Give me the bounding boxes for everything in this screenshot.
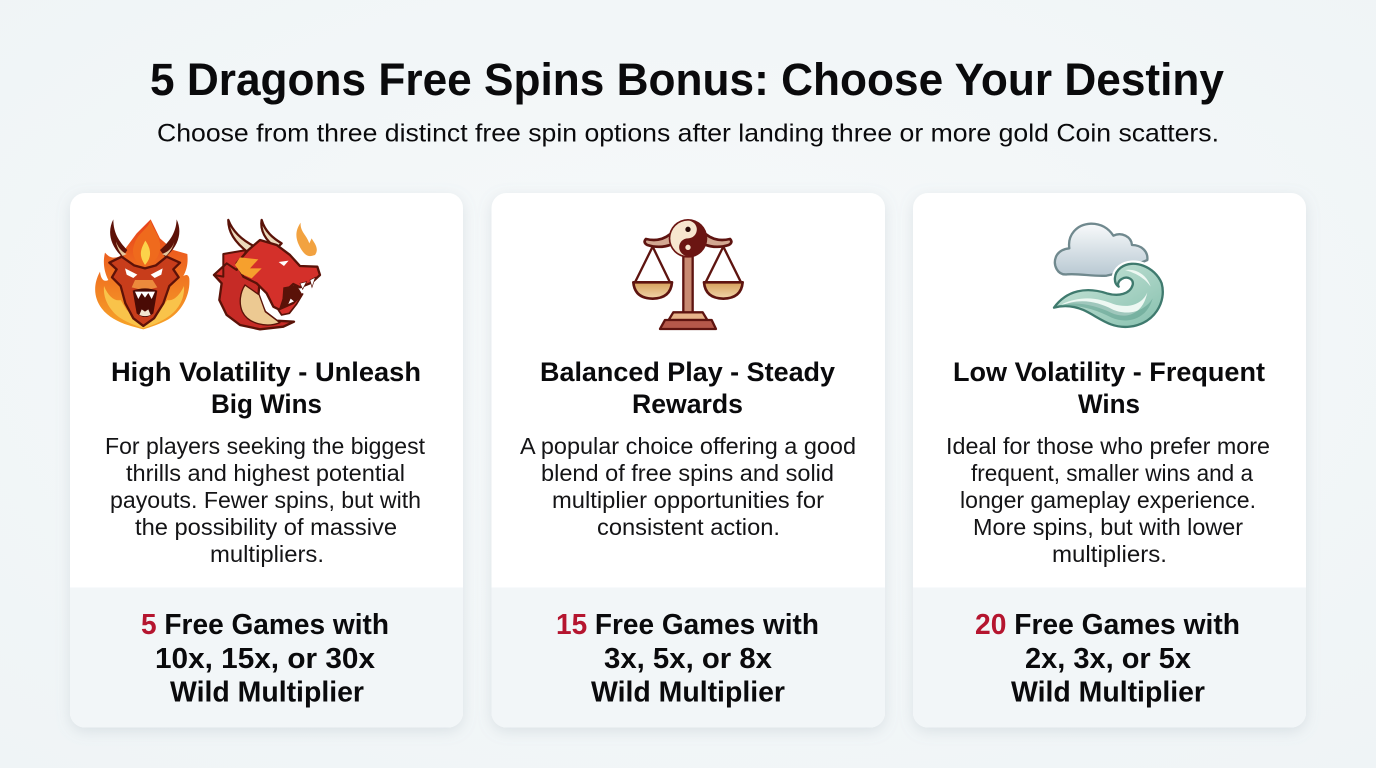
description <box>105 433 426 567</box>
description: the possibility of massive <box>135 514 397 540</box>
heading: High Volatility - Unleash <box>111 357 421 387</box>
heading: Rewards <box>632 389 743 419</box>
heading <box>953 357 1265 419</box>
panel: balanced play <box>492 193 885 728</box>
description <box>520 433 856 540</box>
description: A popular choice offering a good <box>520 433 856 459</box>
free games <box>141 609 389 708</box>
panel: low volatility <box>913 193 1306 728</box>
description: More spins, but with lower <box>973 514 1243 540</box>
description: blend of free spins and solid <box>541 460 834 486</box>
description: frequent, smaller wins and a <box>971 460 1253 486</box>
free games: 3x, 5x, or 8x <box>604 643 772 675</box>
description: multipliers. <box>210 541 324 567</box>
description: payouts. Fewer spins, but with <box>110 487 421 513</box>
free games <box>556 609 819 708</box>
heading: Balanced Play - Steady <box>540 357 835 387</box>
free games: 20 Free Games with <box>975 609 1240 641</box>
description <box>946 433 1270 567</box>
heading <box>540 357 835 419</box>
free games: Wild Multiplier <box>591 676 785 708</box>
description: multipliers. <box>1052 541 1167 567</box>
description: For players seeking the biggest <box>105 433 426 459</box>
icon: red dragon <box>214 220 320 329</box>
panel: high volatility <box>70 193 463 728</box>
description: multiplier opportunities for <box>552 487 824 513</box>
free games: Wild Multiplier <box>1011 676 1205 708</box>
free games: 5 Free Games with <box>141 609 389 641</box>
description: thrills and highest potential <box>126 460 405 486</box>
icon: balance scales with yin yang <box>633 219 743 329</box>
free games <box>975 609 1240 708</box>
description: consistent action. <box>597 514 780 540</box>
heading: Low Volatility - Frequent <box>953 357 1265 387</box>
title: 5 Dragons Free Spins Bonus: Choose Your Destiny <box>150 54 1224 105</box>
free games: 10x, 15x, or 30x <box>155 643 375 675</box>
icon: fire dragon <box>95 219 189 329</box>
heading: Big Wins <box>211 389 322 419</box>
heading: Wins <box>1078 389 1140 419</box>
description: longer gameplay experience. <box>960 487 1256 513</box>
free games: 15 Free Games with <box>556 609 819 641</box>
subtitle: Choose from three distinct free spin options after landing three or more gold Coin scatters. <box>157 120 1219 148</box>
icon: cloud and wave <box>1054 224 1163 327</box>
free games: Wild Multiplier <box>170 676 364 708</box>
description: Ideal for those who prefer more <box>946 433 1270 459</box>
free games: 2x, 3x, or 5x <box>1025 643 1191 675</box>
heading <box>111 357 421 419</box>
